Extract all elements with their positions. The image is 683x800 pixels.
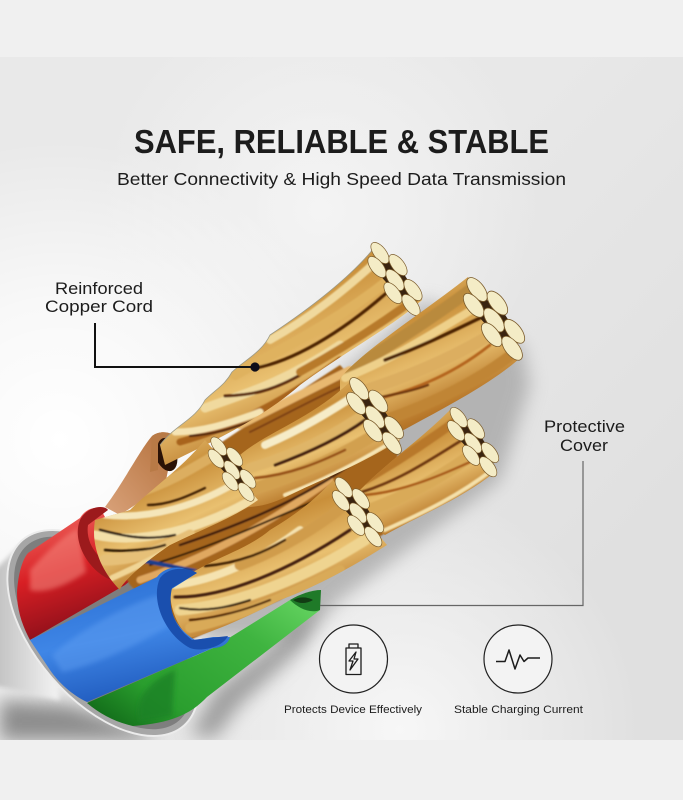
bottom band (0, 740, 683, 800)
leader line: copper cord (95, 323, 255, 367)
callout text: protective cover: Cover (560, 437, 609, 455)
outer white sheath (0, 545, 60, 700)
label: protects device: Protects Device Effectively (284, 704, 423, 716)
strand bundle: upper (160, 239, 426, 465)
title: SAFE, RELIABLE & STABLE (134, 123, 549, 160)
green wire (87, 590, 321, 726)
strand bundle: from red wire (94, 434, 259, 590)
icon: battery with bolt (346, 644, 361, 674)
brown wire (105, 429, 182, 515)
copper tangle inside the cable (110, 365, 400, 640)
sheath rim (0, 494, 236, 772)
label: stable current: Stable Charging Current (454, 704, 583, 716)
feature: protects device (284, 625, 423, 716)
strand bundle: upper right (340, 274, 529, 432)
icon circle: battery (320, 625, 388, 693)
cable illustration (0, 239, 530, 772)
callout: protective cover (320, 418, 625, 606)
blue wire (30, 567, 230, 702)
strand bundle: from blue wire (170, 474, 387, 638)
leader dot (250, 362, 260, 372)
callout text: protective cover: Protective (544, 418, 625, 436)
icon circle: pulse (484, 625, 552, 693)
strand bundle: centre (235, 374, 407, 507)
subtitle: Better Connectivity & High Speed Data Transmission (117, 169, 566, 189)
icon: pulse wave (496, 650, 540, 669)
leader line: protective cover (320, 461, 583, 606)
callout: reinforced copper cord (45, 280, 260, 372)
callout text: copper cord: Copper Cord (45, 298, 153, 316)
cast shadows (0, 300, 530, 740)
red wire (17, 507, 137, 640)
strand bundle: lower right (360, 404, 502, 535)
callout text: copper cord: Reinforced (55, 280, 143, 298)
feature: stable current (454, 625, 583, 716)
